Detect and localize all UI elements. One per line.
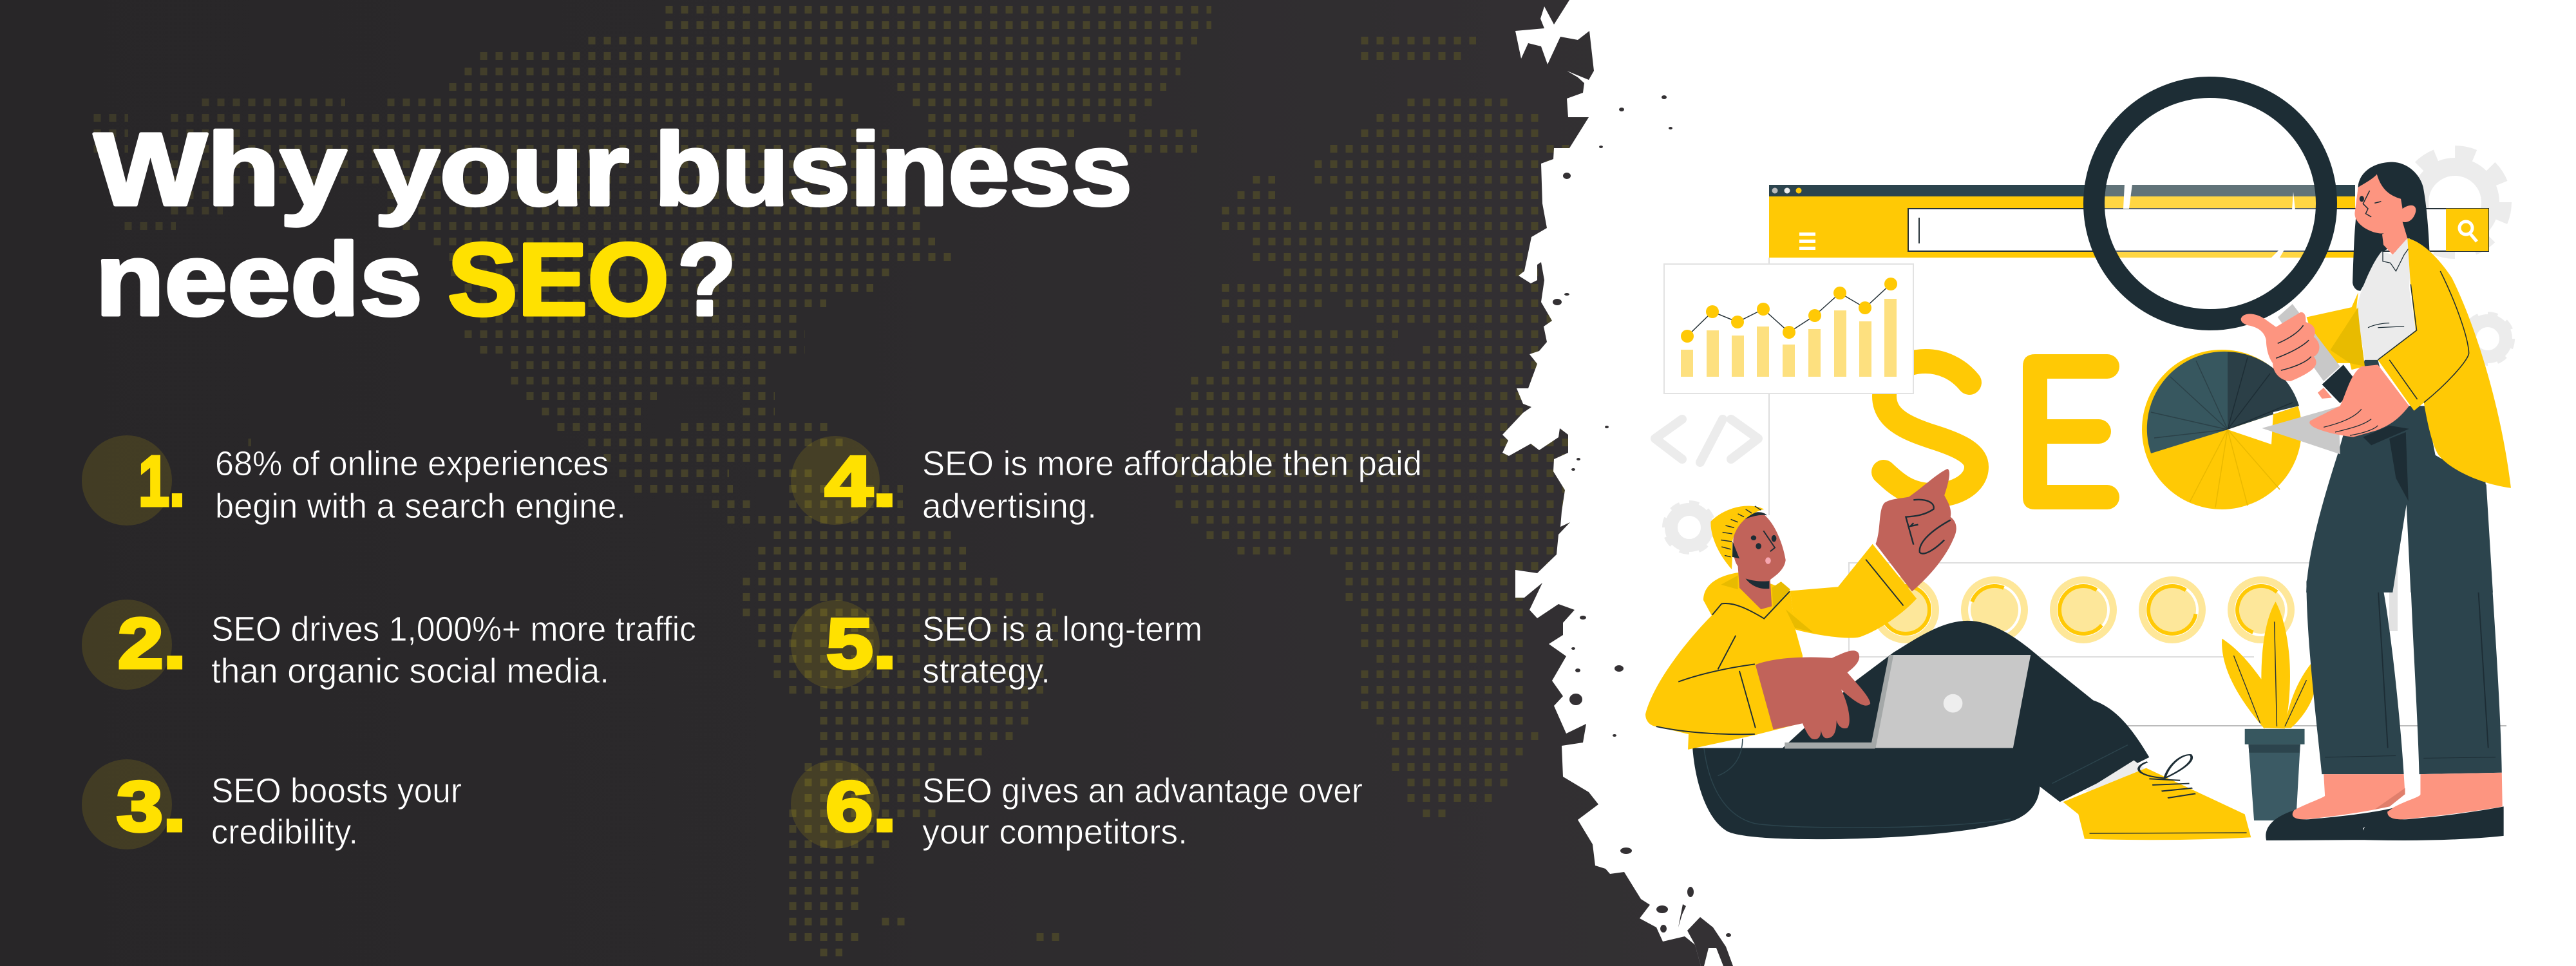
illustration (1645, 88, 2512, 840)
woman legs and feet (2266, 477, 2504, 840)
hoodie head and hands (1645, 469, 1956, 750)
list item 2: SEO drives 1,000%+ more traffic (211, 610, 696, 649)
dotted world map (91, 2, 1585, 960)
list item 2 (82, 600, 696, 690)
list item 6: your competitors. (922, 813, 1188, 851)
title: needs (95, 222, 422, 337)
dark background panel (0, 0, 1803, 966)
list item 1: 68% of online experiences (215, 444, 609, 483)
gear mid right (2463, 314, 2512, 363)
browser window (1769, 185, 2488, 657)
title: Why (94, 111, 346, 227)
title: SEO (448, 222, 669, 337)
list item 1 (82, 435, 626, 526)
list item 3 (82, 759, 462, 851)
list item 6: 6. (826, 767, 896, 846)
list item 1: begin with a search engine. (215, 487, 626, 526)
grey block behind legs (2389, 551, 2398, 631)
progress rings (1872, 576, 2295, 643)
list item 2: than organic social media. (211, 652, 609, 690)
list item 5: strategy. (922, 652, 1050, 690)
list item 4: 4. (825, 442, 896, 521)
title (94, 111, 1132, 337)
plant (2222, 601, 2314, 820)
list item 3: credibility. (211, 813, 358, 851)
list item 3: 3. (117, 767, 186, 846)
title: business (654, 111, 1132, 227)
title: your (374, 111, 629, 227)
woman (2241, 162, 2511, 840)
floor line (2121, 725, 2506, 726)
list item 3: SEO boosts your (211, 772, 462, 810)
list item 4: SEO is more affordable then paid (922, 444, 1422, 483)
gear left (1665, 503, 1714, 552)
ink splatter (1553, 95, 1733, 966)
list item 6: SEO gives an advantage over (922, 772, 1363, 810)
list item 6 (791, 760, 1363, 851)
title: ? (677, 222, 736, 337)
list item 5: 5. (826, 604, 896, 683)
shoe (2063, 755, 2251, 840)
list item 4 (791, 436, 1422, 526)
list item 2: 2. (118, 604, 186, 683)
man legs and body (1692, 621, 2149, 839)
search button (2446, 209, 2488, 251)
letter S (1884, 361, 1976, 495)
woman upper body (2241, 162, 2511, 592)
letter E (2023, 354, 2119, 509)
letter O pie chart (2142, 350, 2302, 509)
laptop (1785, 655, 2031, 748)
list item 1: 1. (138, 442, 185, 521)
list item 4: advertising. (922, 487, 1097, 526)
white torn-paper panel (1502, 0, 2576, 966)
gear top right (2405, 152, 2505, 252)
list item 5: SEO is a long-term (922, 610, 1202, 649)
man (1645, 469, 2251, 840)
code icon (1655, 419, 1758, 462)
list item 5 (791, 600, 1202, 690)
chart card (1664, 264, 1913, 393)
magnifying glass (2094, 88, 2326, 319)
